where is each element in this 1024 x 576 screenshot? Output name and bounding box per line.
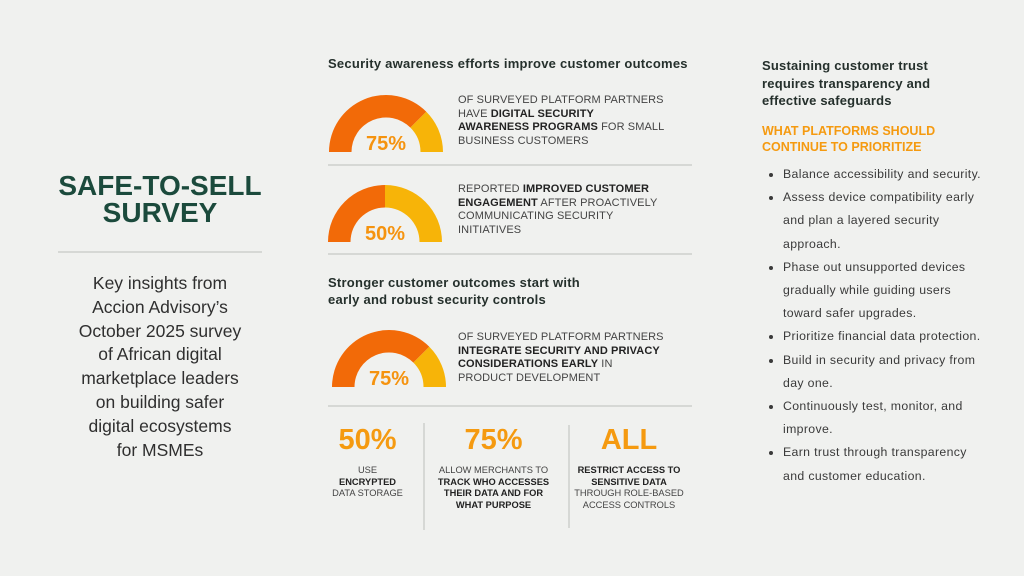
priorities list: gradually while guiding users <box>783 283 951 297</box>
stat: ALL: RESTRICT ACCESS TO <box>578 465 680 475</box>
intro text: for MSMEs <box>117 440 203 460</box>
heading: stronger outcomes <box>328 275 580 307</box>
stat: ALL: SENSITIVE DATA <box>591 477 667 487</box>
text 1: OF SURVEYED PLATFORM PARTNERS <box>458 94 664 106</box>
text 1 <box>458 94 664 147</box>
priorities list: and customer education. <box>783 469 926 483</box>
text 3: PRODUCT DEVELOPMENT <box>458 372 600 384</box>
gauge 3: 75% <box>369 368 409 390</box>
title <box>58 170 262 228</box>
gauge 1: 75% <box>366 133 406 155</box>
right heading: requires transparency and <box>762 76 930 90</box>
intro text: digital ecosystems <box>88 416 231 436</box>
stat: 75% <box>438 424 549 510</box>
priorities list: and plan a layered security <box>783 213 939 227</box>
stat: 75%: ALLOW MERCHANTS TO <box>439 465 548 475</box>
stat: 75%: TRACK WHO ACCESSES <box>438 477 549 487</box>
text 2: ENGAGEMENT AFTER PROACTIVELY <box>458 197 657 209</box>
text 2: REPORTED IMPROVED CUSTOMER <box>458 183 649 195</box>
right heading: Sustaining customer trust <box>762 58 928 73</box>
priorities list: Assess device compatibility early <box>783 190 974 204</box>
priorities list: Build in security and privacy from <box>783 353 975 367</box>
stat: ALL: THROUGH ROLE-BASED <box>574 488 684 498</box>
stat: 50%: USE <box>358 465 377 475</box>
priorities list: Balance accessibility and security. <box>783 167 981 181</box>
intro text: Key insights from <box>93 273 227 293</box>
priorities list: day one. <box>783 376 833 390</box>
intro text <box>79 273 242 460</box>
text 2: INITIATIVES <box>458 224 521 236</box>
stat: 50%: 50% <box>338 424 397 456</box>
stat: ALL: ACCESS CONTROLS <box>583 500 675 510</box>
stat: ALL <box>574 424 684 510</box>
heading: stronger outcomes: early and robust security controls <box>328 292 546 307</box>
gauge 3 <box>332 330 446 390</box>
orange subheading: WHAT PLATFORMS SHOULD <box>762 124 935 138</box>
gauge 1 <box>329 95 443 155</box>
right heading: effective safeguards <box>762 93 892 108</box>
stat: 75%: THEIR DATA AND FOR <box>444 488 543 498</box>
intro text: October 2025 survey <box>79 321 241 341</box>
text 2 <box>458 183 657 236</box>
stat: 75%: WHAT PURPOSE <box>456 500 531 510</box>
text 3: OF SURVEYED PLATFORM PARTNERS <box>458 331 664 343</box>
priorities list: toward safer upgrades. <box>783 306 916 320</box>
stat: 75%: 75% <box>464 424 523 456</box>
intro text: of African digital <box>98 344 222 364</box>
text 3 <box>458 331 664 384</box>
text 1: HAVE DIGITAL SECURITY <box>458 108 594 120</box>
intro text: Accion Advisory’s <box>92 297 228 317</box>
priorities list: improve. <box>783 422 833 436</box>
right heading <box>762 58 930 108</box>
stat: ALL: ALL <box>601 424 657 456</box>
orange subheading: CONTINUE TO PRIORITIZE <box>762 140 922 154</box>
stat: 50%: DATA STORAGE <box>332 488 403 498</box>
heading: security awareness: Security awareness efforts improve customer outcomes <box>328 56 688 71</box>
intro text: on building safer <box>96 392 224 412</box>
orange subheading <box>762 124 935 154</box>
priorities list: Phase out unsupported devices <box>783 260 965 274</box>
text 2: COMMUNICATING SECURITY <box>458 210 613 222</box>
intro text: marketplace leaders <box>81 368 239 388</box>
text 3: INTEGRATE SECURITY AND PRIVACY <box>458 345 660 357</box>
text 1: BUSINESS CUSTOMERS <box>458 135 589 147</box>
priorities list: Prioritize financial data protection. <box>783 329 980 343</box>
priorities list: Earn trust through transparency <box>783 445 967 459</box>
priorities list: approach. <box>783 237 841 251</box>
priorities list <box>769 167 981 483</box>
stat: 50% <box>332 424 403 498</box>
text 1: AWARENESS PROGRAMS FOR SMALL <box>458 121 664 133</box>
heading: stronger outcomes: Stronger customer outcomes start with <box>328 275 580 290</box>
stat: 50%: ENCRYPTED <box>339 477 396 487</box>
title: SAFE-TO-SELL <box>58 170 262 201</box>
text 3: CONSIDERATIONS EARLY IN <box>458 358 612 370</box>
gauge 2: 50% <box>365 223 405 245</box>
gauge 2 <box>328 185 442 245</box>
title: SURVEY <box>103 197 217 228</box>
priorities list: Continuously test, monitor, and <box>783 399 963 413</box>
